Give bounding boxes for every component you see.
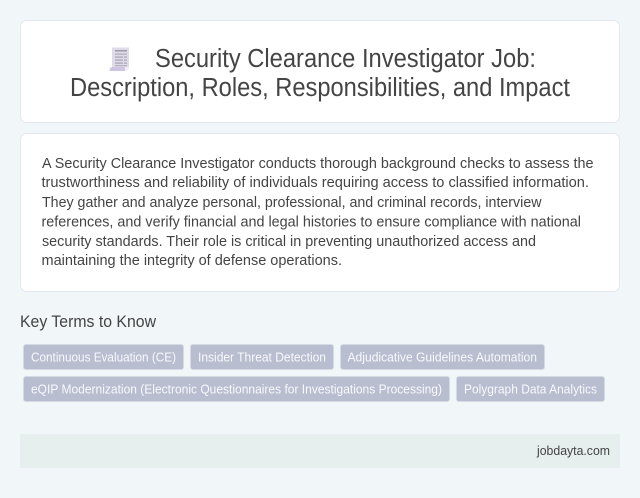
footer source text: jobdayta.com — [536, 444, 610, 458]
chip: continuous evaluation — [24, 344, 184, 370]
chip: insider threat detection — [190, 344, 334, 370]
title: Description, Roles, Responsibilities, and Impact — [70, 74, 570, 102]
chips: key terms — [24, 344, 604, 402]
text block: description: maintaining the integrity of defense operations. — [42, 252, 342, 269]
title — [70, 45, 570, 102]
chip: polygraph data analytics: Polygraph Data Analytics — [464, 382, 597, 396]
chip: adjudicative guidelines automation: Adjudicative Guidelines Automation — [348, 350, 537, 364]
heading: key terms: Key Terms to Know — [20, 313, 156, 331]
footer bar — [20, 434, 620, 468]
panel: description card — [20, 134, 620, 292]
text block: description: A Security Clearance Investigator conducts thorough background checks to assess the — [42, 155, 594, 172]
chip: eqip modernization: eQIP Modernization (Electronic Questionnaires for Investigations Processing) — [31, 382, 442, 396]
chip: insider threat detection: Insider Threat Detection — [198, 350, 326, 364]
title: Security Clearance Investigator Job: — [155, 45, 536, 73]
chip: eqip modernization — [24, 376, 450, 402]
panel: title card — [20, 20, 620, 122]
chip: polygraph data analytics — [456, 376, 604, 402]
text block: description: They gather and analyze personal, professional, and criminal records, interview — [42, 194, 542, 211]
text block: description: security standards. Their role is critical in preventing unauthorized access and — [42, 233, 536, 250]
chip: continuous evaluation: Continuous Evaluation (CE) — [31, 350, 176, 364]
icon: document scroll — [110, 48, 129, 71]
text block: description: trustworthiness and reliability of individuals requiring access to classified information. — [42, 174, 589, 191]
chip: adjudicative guidelines automation — [340, 344, 544, 370]
text block: description: references, and verify financial and legal histories to ensure compliance with national — [42, 214, 581, 230]
text block: description — [42, 155, 594, 269]
